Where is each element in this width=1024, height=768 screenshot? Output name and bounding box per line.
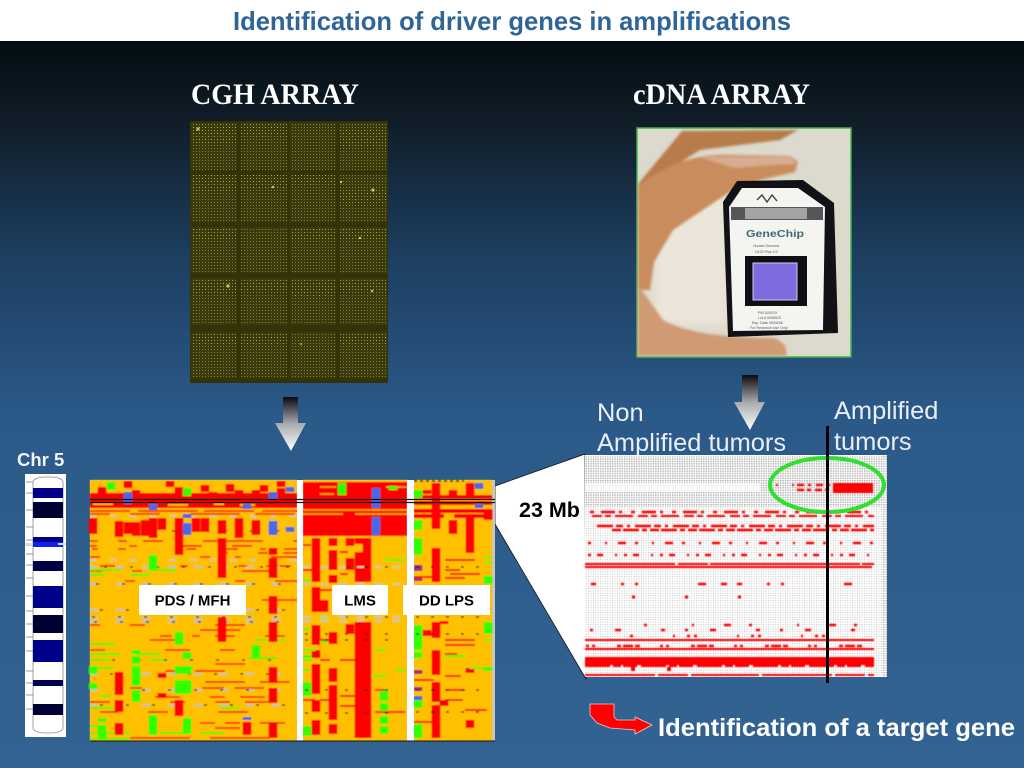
label: LMS: LMS [344, 592, 376, 610]
GeneChip label text: GeneChip [746, 228, 804, 240]
chromosome 5 ideogram [25, 474, 66, 737]
label small text: For Research Use Only [750, 326, 788, 330]
label: DD LPS: DD LPS [419, 592, 474, 610]
label small text: Exp. Date 09/09/08 [752, 321, 783, 325]
label: non amplified tumors: Amplified tumors [597, 429, 786, 457]
heading: cDNA array: cDNA ARRAY [633, 78, 810, 111]
red expression rows [585, 485, 875, 675]
photo: hand holding GeneChip cDNA array [637, 128, 851, 357]
divider between non amplified and amplified tumors [826, 426, 829, 683]
label small text: U133 Plus 2.0 [755, 250, 778, 254]
label: PDS / MFH: PDS / MFH [155, 592, 230, 610]
expression map: cDNA array results [585, 455, 887, 677]
chip window [745, 256, 807, 306]
label: 23 Mb: 23 Mb [519, 498, 580, 522]
label: DD LPS [403, 585, 490, 615]
label: amplified tumors: Amplified [834, 397, 938, 425]
logo mark [757, 195, 777, 202]
label small text: Human Genome [753, 244, 779, 248]
zoom connector [495, 454, 586, 679]
label small text: Lot # 5008523 [758, 316, 781, 320]
arrow: red curved arrow [590, 704, 652, 734]
thumb [638, 285, 787, 356]
label small text: P/N 520019 [758, 311, 777, 315]
panel: LMS [303, 480, 407, 741]
amplified cluster [797, 484, 833, 486]
label: LMS [332, 585, 388, 615]
arrow: cDNA array to expression map [734, 375, 765, 430]
heatmap: CGH array results [90, 480, 495, 741]
conclusion text: Identification of a target gene [658, 714, 1015, 742]
title bar [0, 0, 1024, 41]
bands [33, 488, 63, 715]
label: amplified tumors: tumors [834, 428, 912, 456]
label: non amplified tumors: Non [597, 399, 644, 427]
label small text [750, 244, 788, 330]
label: PDS / MFH [139, 585, 246, 615]
panel: DD LPS [414, 480, 492, 741]
panel: PDS / MFH [90, 480, 323, 741]
hand [638, 130, 798, 290]
label: chromosome 5: Chr 5 [17, 449, 64, 470]
chromosome position lines [90, 500, 495, 502]
heading: CGH array: CGH ARRAY [191, 78, 359, 111]
chip label [729, 188, 825, 331]
CGH microarray image [190, 121, 388, 383]
title: Identification of driver genes in amplifications [233, 6, 791, 36]
barcode [731, 207, 823, 220]
arrow: CGH array to heatmap [275, 397, 306, 451]
chip body [723, 180, 838, 337]
callout: amplified cluster ellipse [770, 458, 884, 512]
palm pale area [655, 195, 727, 325]
